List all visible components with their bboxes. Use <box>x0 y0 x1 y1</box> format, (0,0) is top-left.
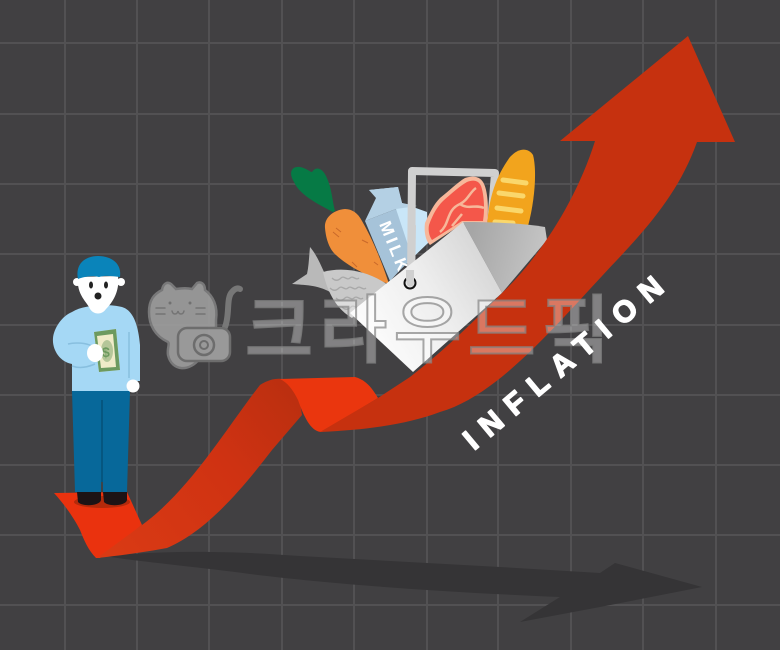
lower ribbon <box>97 379 302 558</box>
basket side <box>463 222 547 293</box>
watermark <box>149 271 610 378</box>
man holding money <box>53 256 140 508</box>
sweater <box>53 305 140 391</box>
handle front <box>411 225 412 283</box>
watermark cat and camera <box>149 282 240 368</box>
handle hole <box>404 278 416 288</box>
shoes <box>77 492 127 505</box>
meat <box>425 177 488 245</box>
leaf <box>291 167 335 212</box>
arrow shadow <box>105 552 702 622</box>
milk label: MILK <box>375 218 413 274</box>
trousers <box>72 391 130 492</box>
ribbon fold <box>280 377 378 432</box>
arrow tail fold <box>54 492 142 558</box>
dollar bill <box>94 329 120 372</box>
watermark text: 크라우드픽 <box>245 271 610 378</box>
basket handle <box>411 171 495 283</box>
dollar bill: $ <box>102 344 110 360</box>
foot shadow <box>74 496 130 508</box>
hands <box>87 344 103 362</box>
head <box>78 276 118 314</box>
face <box>89 282 93 288</box>
arrow tail and fold <box>54 377 378 558</box>
fish <box>292 247 388 318</box>
upper ribbon and arrow head <box>320 36 735 432</box>
INFLATION label: INFLATION <box>457 270 670 456</box>
baguette <box>487 150 535 226</box>
carrot <box>325 209 389 284</box>
basket front <box>350 222 502 372</box>
grocery basket with food <box>291 150 547 372</box>
milk carton <box>365 187 428 281</box>
cap <box>77 256 120 279</box>
